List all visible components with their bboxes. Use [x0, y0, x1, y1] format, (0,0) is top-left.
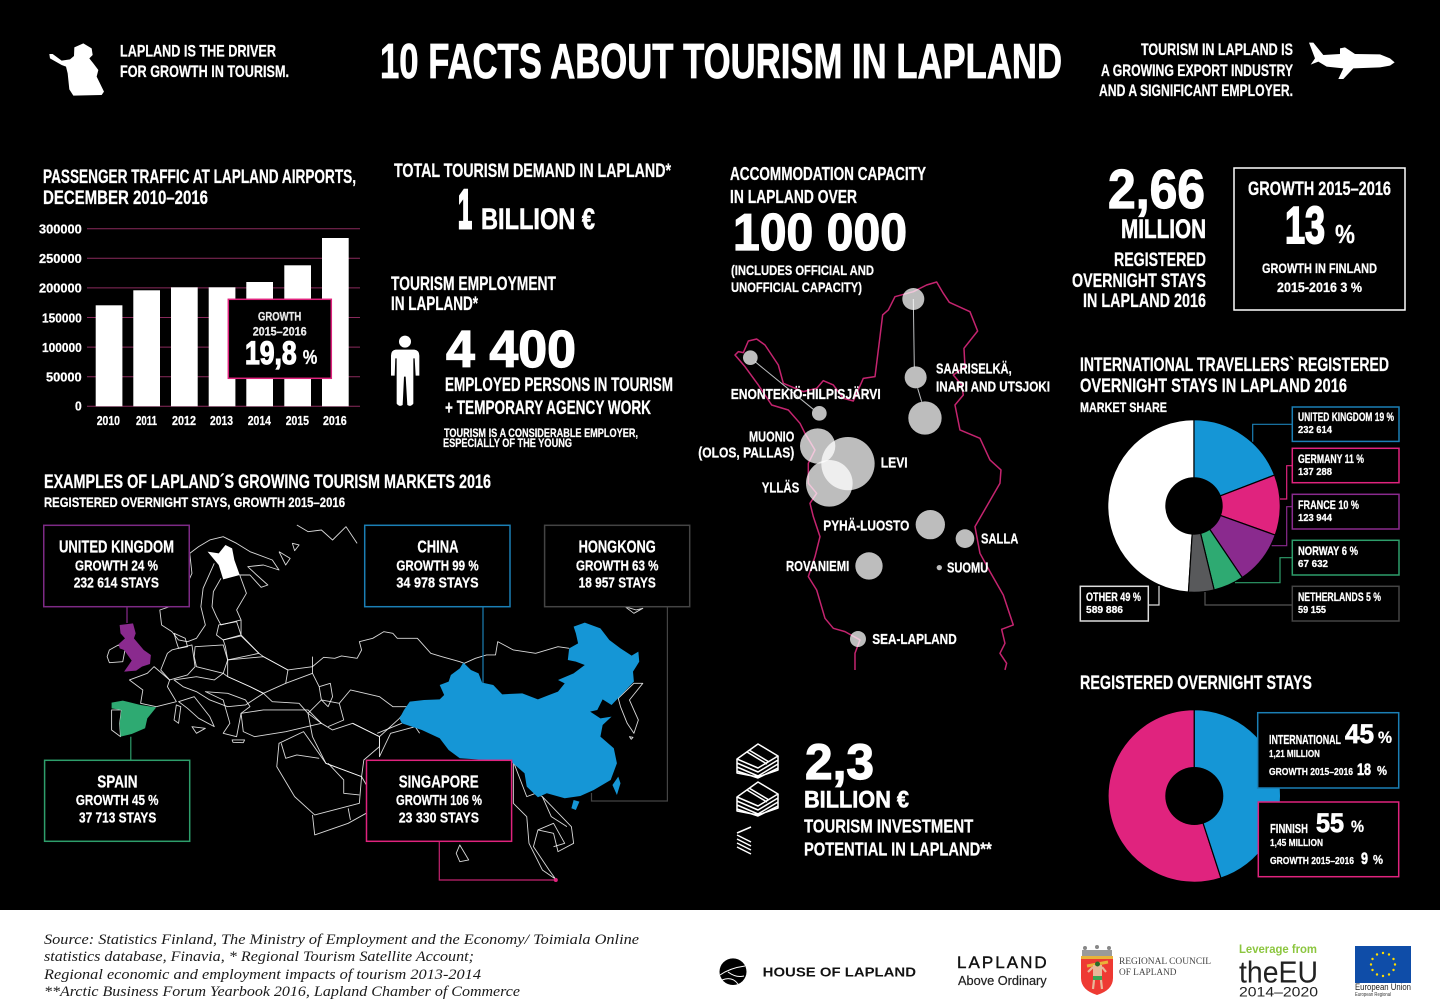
panel: tourism employment: 4 400 [446, 321, 576, 379]
panel: passenger traffic bar chart [39, 167, 360, 428]
panel: accommodation capacity: ACCOMMODATION CAPACITY [730, 164, 926, 184]
callout: Spain [45, 760, 190, 841]
x axis labels: 2010 [97, 413, 120, 428]
callout: growth 19,8 %: GROWTH [258, 309, 301, 323]
callout: United Kingdom: GROWTH 24 % [75, 559, 158, 575]
callout: finnish 55 %: FINNISH [1270, 821, 1308, 836]
map labels: INARI AND UTSJOKI [936, 378, 1050, 395]
callout: finnish 55 %: 9 [1361, 849, 1368, 868]
panel: growing tourism markets heading: EXAMPLES OF LAPLAND´S GROWING TOURISM MARKETS 2016 [44, 472, 491, 493]
header: export industry statement: TOURISM IN LAPLAND IS [1141, 40, 1293, 59]
callout: growth 13 %: 13 [1285, 197, 1325, 255]
logo: Leverage from the EU [1239, 942, 1318, 1000]
x axis labels [97, 413, 347, 428]
header: export industry statement: A GROWING EXPORT INDUSTRY [1101, 61, 1293, 80]
logo: House of Lapland [720, 958, 916, 985]
panel: tourism employment: TOURISM EMPLOYMENT [391, 274, 556, 295]
bars [96, 238, 349, 406]
panel: 2,66 million overnight stays: OVERNIGHT STAYS [1072, 271, 1206, 292]
connector lines [1148, 424, 1292, 605]
panel: 2,66 million overnight stays: REGISTERED [1114, 250, 1206, 271]
header: export industry statement [1099, 40, 1395, 100]
legend: France: 123 944 [1298, 513, 1332, 524]
footer: sources: statistics database, Finavia, * Regional Tourism Satellite Account; [44, 949, 474, 965]
callout: growth 19,8 %: 19,8 [245, 335, 297, 371]
callout: growth 19,8 %: 2015–2016 [253, 325, 307, 339]
legend: United Kingdom [1292, 407, 1399, 441]
donut chart: market share [1108, 420, 1280, 592]
callout: Hongkong: GROWTH 63 % [576, 559, 659, 575]
panel: growing tourism markets heading [44, 472, 491, 510]
panel: accommodation capacity: UNOFFICIAL CAPACITY) [731, 279, 862, 295]
y axis labels: 0 [75, 399, 82, 414]
icon: banknote stacks [737, 744, 778, 854]
logo: Lapland Above Ordinary: Above Ordinary [958, 973, 1047, 988]
callout: international 45 %: GROWTH 2015–2016 [1269, 766, 1353, 778]
title: 10 FACTS ABOUT TOURISM IN LAPLAND [380, 35, 1062, 89]
callout: Spain: 37 713 STAYS [79, 810, 157, 826]
callout: Singapore [366, 760, 512, 841]
logo: Regional Council of Lapland: REGIONAL COUNCIL [1119, 957, 1211, 967]
logo: Lapland Above Ordinary [957, 953, 1047, 988]
logo: Leverage from the EU: 2014–2020 [1239, 984, 1318, 1000]
map labels: (OLOS, PALLAS) [698, 445, 794, 462]
callout: Spain: SPAIN [97, 771, 138, 791]
icon: airplane [1309, 43, 1395, 79]
map labels: SUOMU [947, 559, 988, 576]
legend: United Kingdom: UNITED KINGDOM 19 % [1298, 412, 1394, 424]
callout: international 45 %: % [1377, 763, 1387, 778]
panel: accommodation capacity: 100 000 [733, 204, 907, 262]
panel: accommodation capacity [730, 164, 926, 295]
country: United Kingdom purple [119, 623, 151, 672]
callout: international 45 %: 18 [1357, 760, 1371, 779]
panel: 2,66 million overnight stays: MILLION [1121, 214, 1206, 244]
callout: Hongkong: HONGKONG [579, 537, 656, 557]
world map: Europe and Asia with highlighted countries [44, 525, 690, 882]
panel: tourism employment: ESPECIALLY OF THE YOUNG [443, 438, 572, 450]
legend: United Kingdom: 232 614 [1298, 425, 1332, 436]
logo: European Union flag: European Union [1355, 982, 1411, 992]
panel: tourism investment potential: POTENTIAL IN LAPLAND** [804, 840, 992, 860]
callout: Singapore: 23 330 STAYS [399, 810, 479, 826]
panel: accommodation capacity: IN LAPLAND OVER [730, 187, 857, 207]
callout: United Kingdom [44, 525, 189, 607]
y axis labels: 150000 [42, 310, 82, 325]
callout: finnish 55 %: % [1351, 817, 1364, 836]
panel: total tourism demand: TOTAL TOURISM DEMAND IN LAPLAND* [394, 161, 671, 182]
map labels: SAARISELKÄ, [936, 360, 1012, 377]
callout: China: 34 978 STAYS [396, 576, 479, 592]
callout: growth 13 %: GROWTH 2015–2016 [1248, 179, 1391, 200]
callout: Hongkong [545, 525, 690, 607]
panel: tourism investment potential [737, 734, 992, 860]
callout: finnish 55 %: 1,45 MILLION [1270, 837, 1323, 849]
callout: growth 13 %: % [1335, 219, 1355, 249]
callout: finnish 55 %: 55 [1316, 808, 1344, 838]
map labels [698, 360, 1050, 648]
country: Finland white [208, 545, 240, 579]
panel: total tourism demand [394, 161, 671, 240]
panel: tourism employment: TOURISM IS A CONSIDERABLE EMPLOYER, [444, 428, 638, 440]
legend: France: FRANCE 10 % [1298, 500, 1359, 512]
x axis labels: 2012 [172, 413, 196, 428]
panel: tourism employment: EMPLOYED PERSONS IN TOURISM [445, 375, 673, 396]
panel: passenger traffic bar chart: PASSENGER TRAFFIC AT LAPLAND AIRPORTS, [43, 167, 356, 188]
header: Lapland statement: FOR GROWTH IN TOURISM. [120, 62, 289, 81]
callout: Spain: GROWTH 45 % [76, 793, 159, 809]
bubbles [743, 288, 974, 647]
footer: sources: **Arctic Business Forum Yearbook 2016, Lapland Chamber of Commerce [44, 984, 520, 1000]
panel: 2,66 million overnight stays [1072, 158, 1206, 312]
connector lines [127, 607, 667, 882]
callout: United Kingdom: 232 614 STAYS [74, 576, 159, 592]
panel: international travellers market share: OVERNIGHT STAYS IN LAPLAND 2016 [1080, 376, 1347, 397]
panel: tourism employment: IN LAPLAND* [391, 294, 478, 315]
callout: finnish 55 %: GROWTH 2015–2016 [1270, 855, 1354, 867]
callout: international 45 % [1258, 713, 1399, 788]
map labels: MUONIO [749, 428, 795, 445]
map labels: YLLÄS [762, 479, 799, 496]
legend: Norway [1292, 540, 1399, 575]
logo: European Union flag [1355, 946, 1411, 998]
panel: tourism investment potential: TOURISM INVESTMENT [804, 817, 973, 837]
callout: growth 13 %: 2015-2016 3 % [1277, 279, 1362, 295]
legend: Germany: 137 288 [1298, 467, 1332, 478]
panel: passenger traffic bar chart: DECEMBER 2010–2016 [43, 188, 208, 209]
icon: coat of arms [1081, 945, 1113, 995]
y axis labels: 200000 [39, 281, 82, 296]
map labels: LEVI [881, 454, 908, 471]
header: Lapland statement: LAPLAND IS THE DRIVER [120, 42, 276, 60]
panel: tourism investment potential: 2,3 [805, 734, 874, 790]
callout: growth 13 % [1234, 168, 1405, 310]
panel: 2,66 million overnight stays: 2,66 [1108, 158, 1205, 220]
x axis labels: 2015 [286, 413, 309, 428]
legend: Germany [1292, 448, 1399, 483]
logo: House of Lapland: HOUSE OF LAPLAND [763, 965, 916, 980]
x axis labels: 2014 [248, 413, 272, 428]
header: Lapland statement [49, 42, 289, 96]
callout: international 45 %: 45 [1345, 719, 1374, 749]
callout: growth 19,8 %: % [303, 347, 317, 369]
map labels: ENONTEKIÖ-HILPISJÄRVI [731, 386, 881, 403]
callout: China: GROWTH 99 % [396, 559, 479, 575]
callout: China: CHINA [417, 537, 459, 557]
callout: finnish 55 %: % [1373, 852, 1383, 867]
panel: total tourism demand: BILLION € [481, 203, 595, 236]
callout: Singapore: SINGAPORE [399, 771, 479, 791]
panel: tourism investment potential: BILLION € [804, 787, 909, 814]
callout: international 45 %: INTERNATIONAL [1269, 732, 1341, 747]
legend: Germany: GERMANY 11 % [1298, 454, 1364, 466]
map: Lapland border [735, 282, 1013, 670]
logo: Leverage from the EU: Leverage from [1239, 942, 1317, 956]
footer: sources [43, 932, 639, 1000]
x axis labels: 2016 [323, 413, 347, 428]
donut chart: international vs finnish [1108, 710, 1281, 882]
panel: tourism employment: + TEMPORARY AGENCY WORK [445, 398, 651, 419]
panel: Lapland map with destination bubbles [698, 282, 1050, 670]
callout: growth 13 %: GROWTH IN FINLAND [1262, 260, 1377, 276]
logo: Regional Council of Lapland [1081, 945, 1211, 995]
x axis labels: 2011 [136, 413, 157, 428]
icon: Lapland silhouette [49, 43, 104, 96]
logo: European Union flag: European Regional [1355, 992, 1391, 998]
legend: Netherlands: 59 155 [1298, 605, 1326, 616]
y axis labels: 250000 [39, 251, 82, 266]
y axis labels: 50000 [46, 370, 82, 385]
country: Spain green [112, 701, 156, 737]
panel: total tourism demand: 1 [458, 178, 472, 240]
callout: United Kingdom: UNITED KINGDOM [59, 537, 174, 557]
logo: Lapland Above Ordinary: LAPLAND [957, 953, 1047, 972]
legend: Norway: 67 632 [1298, 559, 1328, 570]
panel: 2,66 million overnight stays: IN LAPLAND 2016 [1083, 291, 1206, 312]
legend: Other: OTHER 49 % [1086, 592, 1141, 604]
map labels: SEA-LAPLAND [872, 631, 957, 648]
callout: Singapore: GROWTH 106 % [396, 793, 482, 809]
legend: Netherlands [1292, 586, 1399, 621]
logo: Leverage from the EU: theEU [1239, 955, 1318, 990]
legend: Norway: NORWAY 6 % [1298, 546, 1358, 558]
footer: sources: Regional economic and employment impacts of tourism 2013-2014 [43, 967, 482, 983]
map labels: PYHÄ-LUOSTO [823, 518, 910, 535]
y axis labels: 300000 [39, 221, 82, 236]
panel: registered overnight stays [1080, 673, 1399, 882]
callout: international 45 %: 1,21 MILLION [1269, 748, 1320, 760]
footer band [0, 910, 1440, 1002]
legend: Other [1080, 586, 1148, 621]
panel: international travellers market share [1080, 355, 1399, 621]
y axis labels: 100000 [42, 340, 82, 355]
panel: growing tourism markets heading: REGISTERED OVERNIGHT STAYS, GROWTH 2015–2016 [44, 494, 345, 510]
panel: international travellers market share: MARKET SHARE [1080, 399, 1167, 415]
icon: person [391, 336, 419, 406]
legend: Netherlands: NETHERLANDS 5 % [1298, 592, 1381, 604]
panel: accommodation capacity: (INCLUDES OFFICIAL AND [731, 262, 874, 278]
callout: international 45 %: % [1378, 728, 1392, 747]
panel: registered overnight stays: REGISTERED OVERNIGHT STAYS [1080, 673, 1312, 694]
x axis labels: 2013 [210, 413, 233, 428]
panel: tourism employment [391, 274, 673, 450]
country: China blue [400, 623, 639, 810]
legend: France [1292, 494, 1399, 529]
callout: growth 19,8 % [228, 299, 331, 378]
map labels: ROVANIEMI [786, 558, 849, 575]
logo: Regional Council of Lapland: OF LAPLAND [1119, 968, 1177, 978]
legend: Other: 589 886 [1086, 605, 1123, 616]
callout: Hongkong: 18 957 STAYS [579, 576, 656, 592]
footer: sources: Source: Statistics Finland, The Ministry of Employment and the Economy/ Toimiala Online [44, 932, 639, 948]
map labels: SALLA [981, 530, 1018, 547]
callout: China [365, 525, 510, 607]
header: export industry statement: AND A SIGNIFICANT EMPLOYER. [1099, 81, 1293, 100]
map: country outlines [107, 525, 643, 879]
y axis labels [39, 221, 82, 414]
callout: finnish 55 % [1258, 802, 1399, 877]
